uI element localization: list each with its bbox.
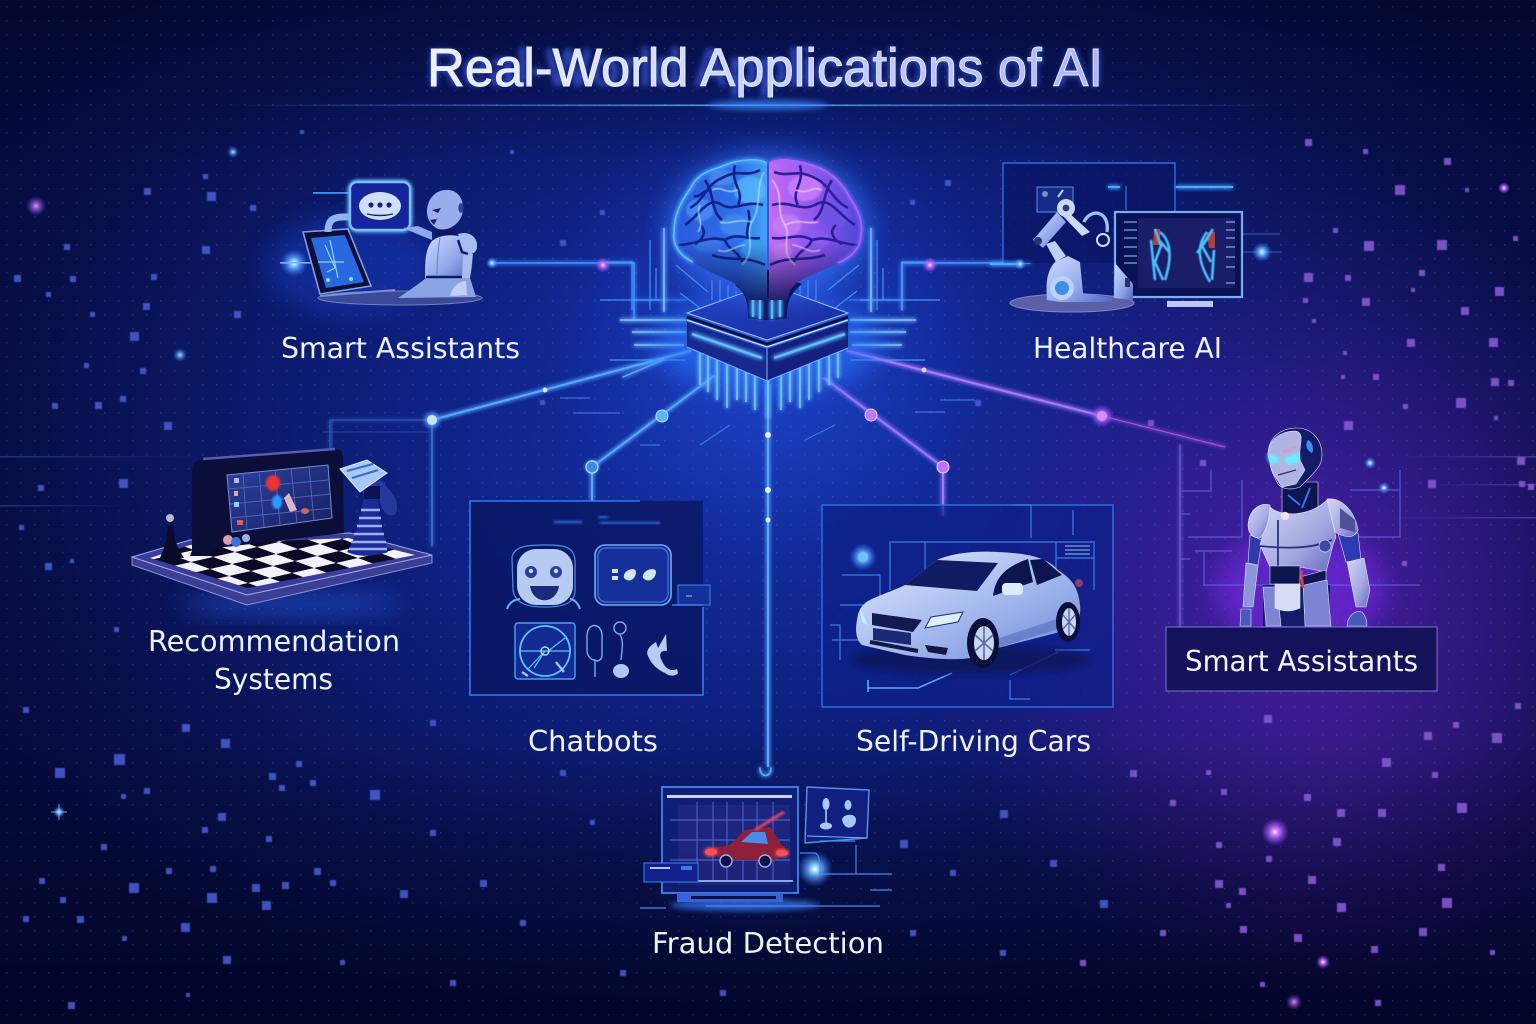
brain right hemisphere bbox=[769, 160, 861, 300]
robot bbox=[1240, 428, 1370, 626]
door shading bbox=[990, 618, 1062, 650]
game monitor bbox=[192, 449, 344, 551]
connecting tube bbox=[328, 217, 350, 232]
chip top face bbox=[687, 284, 848, 340]
panel: smart assistants robot bbox=[1180, 428, 1420, 650]
speech bubble bbox=[350, 182, 410, 230]
label: self-driving cars: Self-Driving Cars bbox=[856, 725, 1091, 758]
glowing eyes bbox=[1268, 453, 1298, 464]
background traces bbox=[1180, 470, 1420, 585]
connector: fraud detection bbox=[760, 381, 771, 776]
grille bbox=[872, 613, 922, 632]
chip glow bars bbox=[692, 334, 845, 358]
label: fraud detection: Fraud Detection bbox=[652, 927, 884, 960]
label: recommendation systems: Systems bbox=[214, 663, 333, 696]
side screen bbox=[805, 787, 869, 843]
chip pins bbox=[700, 352, 838, 418]
robotic arm bbox=[1033, 199, 1133, 302]
label: recommendation systems: Recommendation bbox=[148, 625, 400, 658]
striped figure with tablet bbox=[340, 460, 397, 556]
flagged car bbox=[705, 812, 788, 867]
label: smart assistants: Smart Assistants bbox=[281, 332, 520, 365]
small side panel bbox=[644, 863, 698, 882]
brain left hemisphere bbox=[674, 160, 767, 300]
legs bbox=[1263, 585, 1330, 626]
chess pieces bbox=[160, 514, 250, 558]
monitor bbox=[1115, 212, 1242, 307]
platform bbox=[1010, 294, 1134, 312]
panel: recommendation systems bbox=[132, 420, 432, 614]
connector: recommendation bbox=[330, 351, 690, 546]
central chip bbox=[653, 284, 883, 418]
brain stem bbox=[735, 270, 802, 320]
title underline bbox=[210, 100, 1300, 110]
panel: chatbots bbox=[470, 501, 710, 695]
neck bbox=[1282, 482, 1318, 515]
panel: smart assistants top-left bbox=[265, 182, 482, 315]
connector: top-left to smart assistants bbox=[490, 263, 686, 320]
connector: self-driving cars bbox=[824, 378, 943, 515]
label: healthcare AI: Healthcare AI bbox=[1033, 332, 1222, 365]
platform bbox=[318, 291, 482, 305]
traces bbox=[640, 841, 892, 908]
connector: right smart assistants bbox=[848, 351, 1225, 627]
label box: smart assistants right bbox=[1166, 627, 1437, 691]
icon: phone bbox=[647, 634, 678, 676]
icon: speech bubble bbox=[595, 545, 710, 605]
connector nodes bbox=[421, 257, 1114, 522]
pelvis bbox=[1275, 584, 1300, 611]
icon: pins bbox=[587, 622, 629, 678]
chip side faces bbox=[687, 322, 767, 381]
robot bbox=[398, 190, 477, 298]
shoulders bbox=[1248, 504, 1270, 538]
windshield bbox=[905, 560, 998, 591]
glow line left bbox=[280, 249, 314, 277]
brain right outline bbox=[769, 160, 862, 263]
belt bbox=[1270, 566, 1300, 584]
icon: smiling bot bbox=[507, 545, 580, 609]
panel: fraud detection bbox=[640, 787, 892, 911]
panel frame bbox=[1003, 163, 1175, 263]
headlights bbox=[925, 612, 963, 628]
mirror bbox=[1002, 583, 1023, 595]
label: recommendation systems bbox=[148, 625, 400, 696]
small screen bbox=[1037, 187, 1073, 212]
panel frame bbox=[822, 505, 1113, 707]
title: Real-World Applications of AI bbox=[427, 38, 1103, 98]
hud panel bbox=[830, 505, 1094, 699]
side windows bbox=[993, 559, 1033, 596]
connector: top-right to healthcare bbox=[850, 263, 1030, 310]
head bbox=[1268, 428, 1322, 489]
chess board bbox=[132, 533, 432, 605]
label: chatbots: Chatbots bbox=[528, 725, 658, 758]
panel: healthcare AI bbox=[990, 163, 1242, 312]
car bbox=[856, 552, 1083, 668]
torso bbox=[1260, 500, 1336, 572]
label box: smart assistants right: Smart Assistants bbox=[1185, 645, 1418, 678]
small glowing lines bbox=[990, 187, 1233, 264]
glow line top bbox=[313, 192, 349, 194]
brain left outline bbox=[674, 160, 767, 262]
panel frame bbox=[470, 501, 703, 695]
central circuitry traces bbox=[560, 228, 975, 445]
arms bbox=[1248, 535, 1262, 565]
trace lines bbox=[322, 420, 432, 450]
connector: chatbots bbox=[592, 376, 714, 500]
icon: dial bbox=[515, 623, 575, 679]
title: Real-World Applications of AI bbox=[427, 38, 1103, 98]
wheels bbox=[967, 602, 1080, 668]
glow orb bbox=[797, 851, 833, 887]
panel: self-driving cars bbox=[822, 505, 1113, 707]
tablet bbox=[303, 229, 395, 296]
monitor bbox=[662, 787, 798, 902]
brain bbox=[665, 150, 870, 320]
connector network bbox=[330, 263, 1225, 776]
